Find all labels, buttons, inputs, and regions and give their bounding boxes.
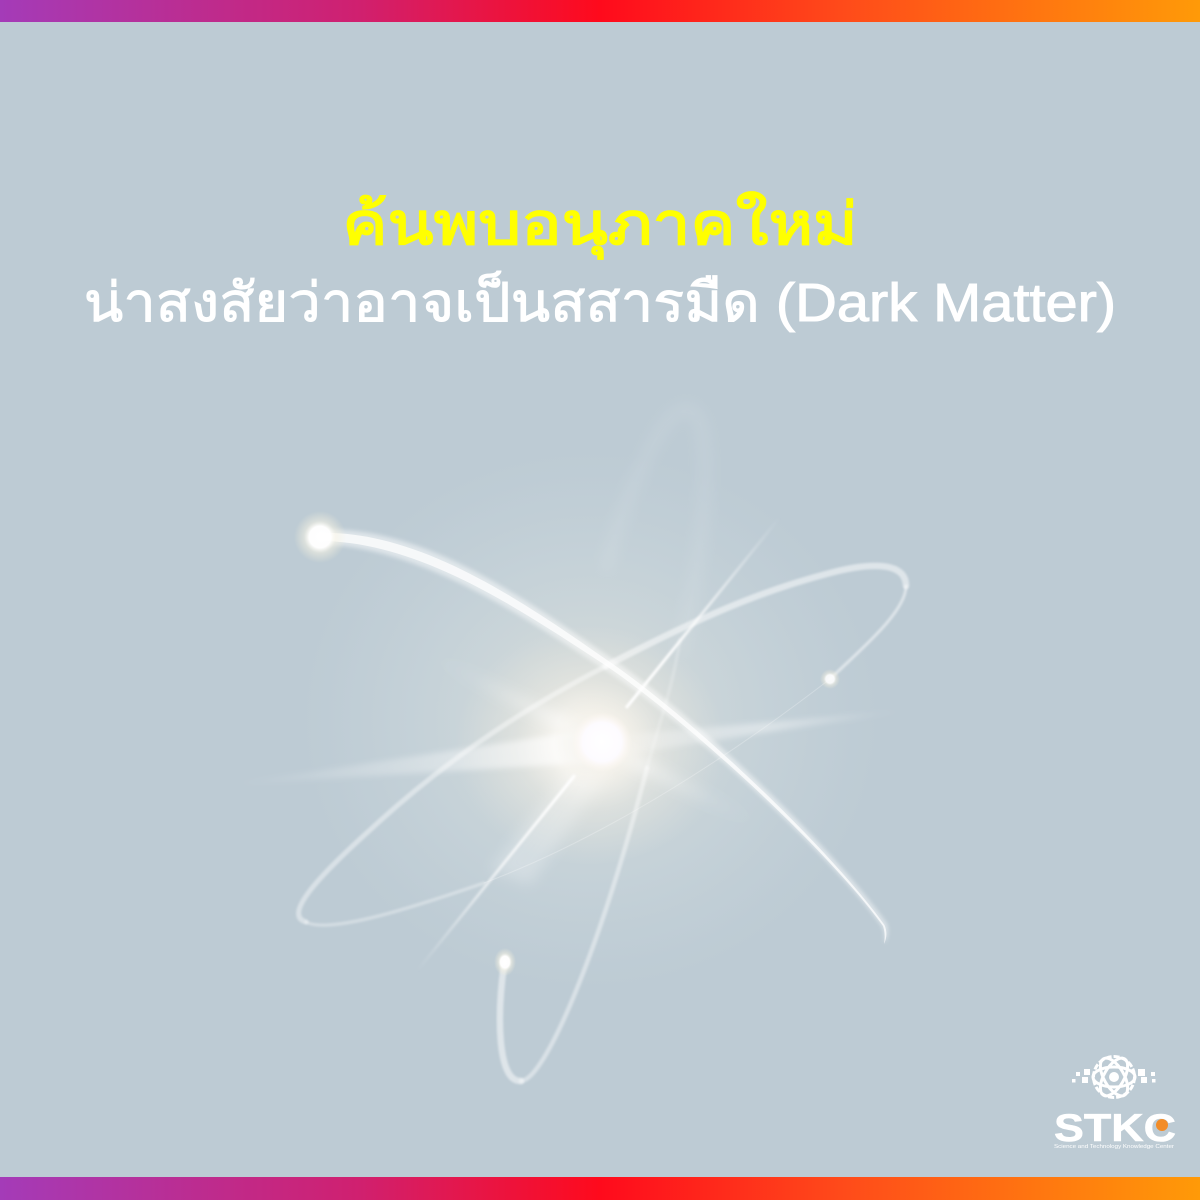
- central glow: [225, 450, 910, 990]
- electron: right: [820, 669, 840, 689]
- logo accent dot: [1156, 1119, 1168, 1131]
- diagonal light streak: [417, 517, 780, 971]
- logo icon: atom with pixels: [1072, 1054, 1156, 1100]
- top gradient bar: [0, 0, 1200, 22]
- heading: ค้นพบอนุภาคใหม่: [342, 192, 858, 257]
- logo tagline: Science and Technology Knowledge Center: [1054, 1144, 1174, 1150]
- electron: bottom: [494, 948, 516, 976]
- orbit: lower electron: [500, 640, 680, 1081]
- nucleus: [554, 694, 650, 790]
- logo wordmark: STKC: [1054, 1107, 1176, 1150]
- electron: upper left: [294, 511, 346, 563]
- orbit: main bright arc: [319, 530, 888, 944]
- subheading: น่าสงสัยว่าอาจเป็นสสารมืด (Dark Matter): [84, 273, 1116, 333]
- orbit: right electron: [299, 566, 906, 925]
- orbit: faint upper loop: [606, 409, 705, 653]
- bottom gradient bar: [0, 1177, 1200, 1200]
